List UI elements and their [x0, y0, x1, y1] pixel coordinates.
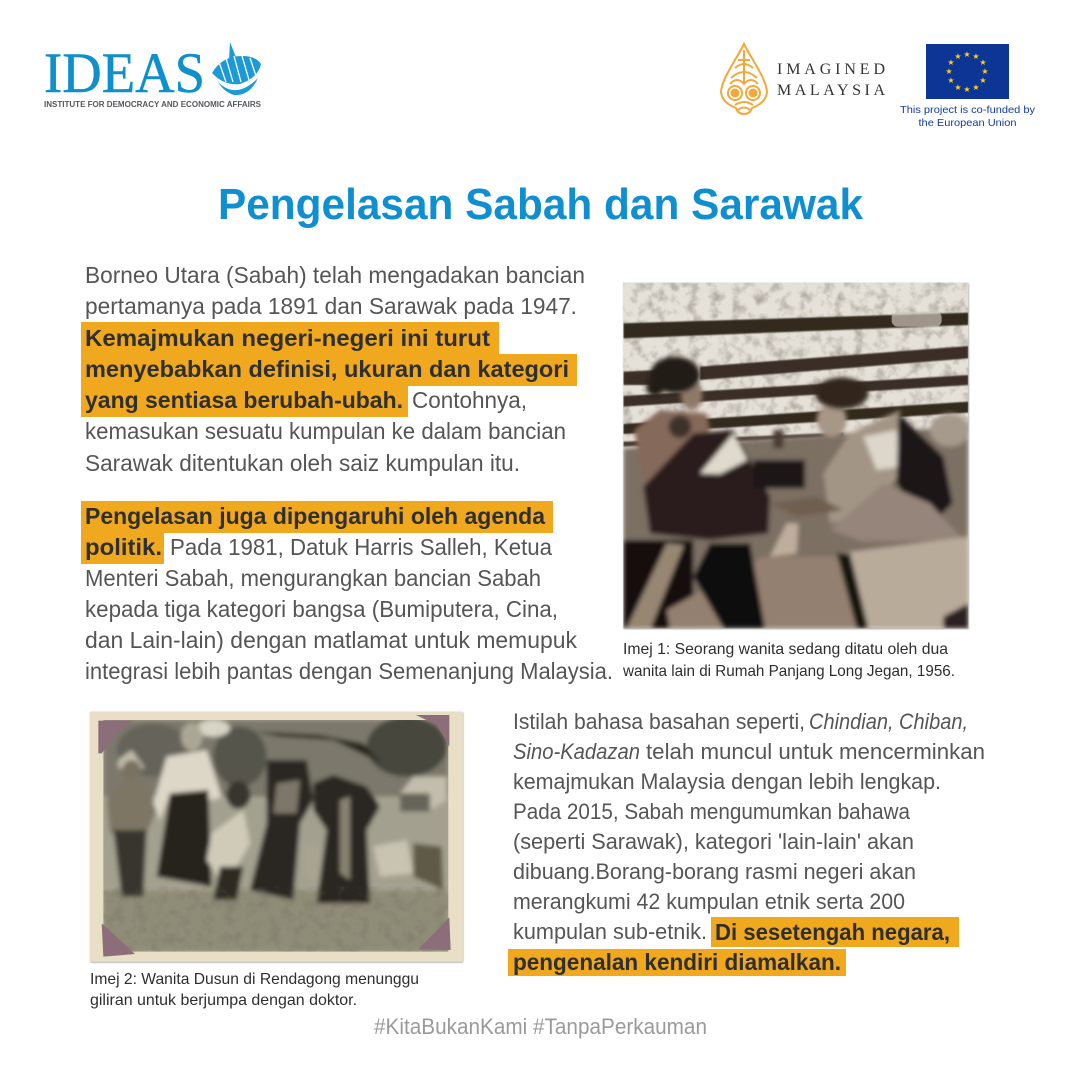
- paragraph text: integrasi lebih pantas dengan Semenanjung Malaysia.: [85, 658, 613, 684]
- EU flag: ★: [979, 76, 987, 85]
- caption: image 2: giliran untuk berjumpa dengan doktor.: [90, 992, 357, 1009]
- logo: Imagined Malaysia: [721, 44, 885, 114]
- paragraph text: telah muncul untuk mencerminkan: [646, 739, 985, 764]
- paragraph text: Borneo Utara (Sabah) telah mengadakan bancian: [85, 262, 585, 288]
- caption: image 1: wanita lain di Rumah Panjang Long Jegan, 1956.: [622, 663, 955, 680]
- Imagined Malaysia wordmark: IMAGINED: [777, 61, 885, 78]
- icon: IDEAS bird: [212, 42, 261, 95]
- caption: image 2: Imej 2: Wanita Dusun di Rendagong menunggu: [90, 971, 419, 988]
- EU flag: [926, 44, 1009, 99]
- EU flag: ★: [972, 52, 980, 61]
- EU flag: ★: [945, 67, 953, 76]
- hashtags: #KitaBukanKami #TanpaPerkauman: [374, 1014, 707, 1039]
- EU flag: ★: [954, 83, 962, 92]
- paragraph text: [85, 262, 585, 476]
- title: Pengelasan Sabah dan Sarawak: [218, 180, 864, 229]
- photo 1: tattooing at longhouse: [623, 283, 970, 628]
- paragraph text: Istilah bahasa basahan seperti,: [513, 709, 805, 734]
- paragraph text: dibuang.Borang-borang rasmi negeri akan: [513, 859, 916, 884]
- paragraph text: dan Lain-lain) dengan matlamat untuk memupuk: [85, 627, 577, 653]
- logo: European Union flag: [900, 44, 1036, 129]
- highlight bars: [81, 501, 553, 564]
- icon: gold kayon: [721, 44, 767, 114]
- photo corners: [98, 715, 451, 957]
- co-funding note: [900, 104, 1036, 129]
- paragraph text: kepada tiga kategori bangsa (Bumiputera, Cina,: [85, 596, 558, 622]
- IDEAS wordmark: IDEAS: [44, 42, 205, 105]
- paragraph text: Sarawak ditentukan oleh saiz kumpulan itu.: [85, 450, 520, 476]
- paragraph text: (seperti Sarawak), kategori 'lain-lain' akan: [513, 829, 914, 854]
- EU flag: ★: [972, 83, 980, 92]
- paragraph text: Di sesetengah negara,: [715, 919, 950, 945]
- paragraph text: kumpulan sub-etnik.: [513, 919, 707, 944]
- paragraph text: kemasukan sesuatu kumpulan ke dalam bancian: [85, 418, 566, 444]
- photo 2: Dusun women at Rendagong: [90, 712, 463, 962]
- paragraph text: Menteri Sabah, mengurangkan bancian Sabah: [85, 565, 541, 591]
- EU flag: ★: [963, 85, 971, 94]
- caption: image 1: Imej 1: Seorang wanita sedang ditatu oleh dua: [623, 641, 948, 658]
- EU flag: ★: [947, 58, 955, 67]
- EU flag: ★: [963, 50, 971, 59]
- EU flag: ★: [981, 67, 989, 76]
- paragraph text: Sino-Kadazan: [513, 739, 640, 764]
- paragraph text: menyebabkan definisi, ukuran dan kategori: [85, 356, 569, 382]
- paragraph text: [85, 503, 613, 684]
- caption: image 1: [622, 641, 955, 680]
- highlight bars: [81, 322, 577, 417]
- logo: IDEAS: [44, 42, 262, 109]
- paragraph text: Kemajmukan negeri-negeri ini turut: [85, 325, 490, 351]
- co-funding note: This project is co-funded by: [900, 104, 1036, 116]
- paragraph text: merangkumi 42 kumpulan etnik serta 200: [513, 889, 905, 914]
- EU flag: ★: [979, 58, 987, 67]
- IDEAS full name: INSTITUTE FOR DEMOCRACY AND ECONOMIC AFFAIRS: [44, 100, 262, 109]
- text block: census history: [81, 262, 585, 476]
- paragraph text: Pada 1981, Datuk Harris Salleh, Ketua: [170, 534, 553, 560]
- paragraph text: politik.: [85, 534, 162, 560]
- paragraph text: kemajmukan Malaysia dengan lebih lengkap.: [513, 769, 941, 794]
- EU flag: ★: [947, 76, 955, 85]
- paragraph text: pertamanya pada 1891 dan Sarawak pada 1947.: [85, 293, 577, 319]
- paragraph text: Pengelasan juga dipengaruhi oleh agenda: [85, 503, 546, 529]
- EU flag: ★: [954, 52, 962, 61]
- paragraph text: yang sentiasa berubah-ubah.: [85, 387, 403, 413]
- caption: image 2: [90, 971, 419, 1009]
- paragraph text: pengenalan kendiri diamalkan.: [513, 949, 841, 975]
- paragraph text: [513, 709, 985, 975]
- co-funding note: the European Union: [918, 117, 1017, 129]
- text block: vernacular terms: [508, 709, 985, 976]
- paragraph text: Chindian, Chiban,: [809, 709, 968, 734]
- text block: political agenda: [81, 501, 613, 684]
- highlight bars: [508, 917, 959, 976]
- logo: Imagined Malaysia: MALAYSIA: [777, 82, 885, 99]
- paragraph text: Pada 2015, Sabah mengumumkan bahawa: [513, 799, 910, 824]
- paragraph text: Contohnya,: [412, 387, 527, 413]
